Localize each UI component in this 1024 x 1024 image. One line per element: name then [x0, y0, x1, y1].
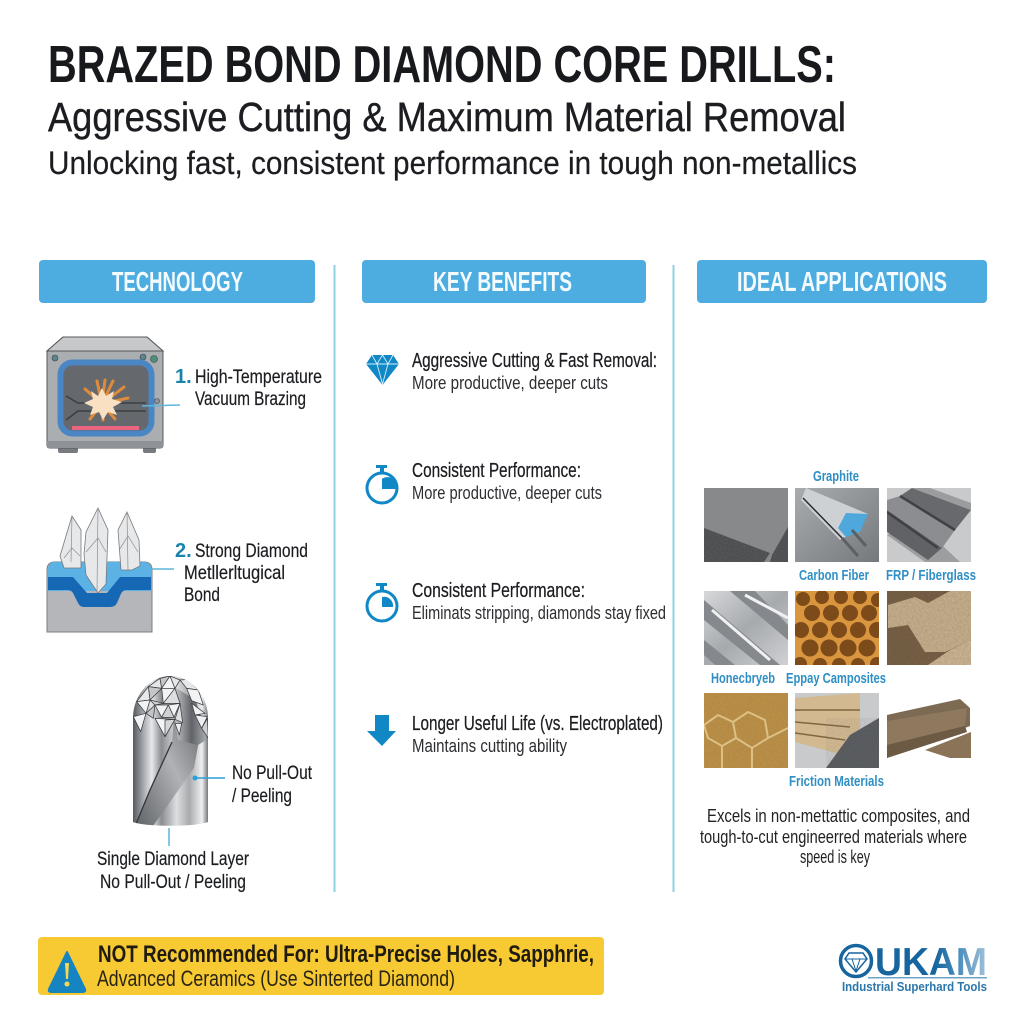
benefit: eliminates stripping: [412, 580, 666, 623]
benefit: aggressive cutting: More productive, deeper cuts: [412, 373, 608, 393]
icon: logo diamond ring: [840, 946, 872, 976]
label: frp fiberglass: FRP / Fiberglass: [886, 568, 976, 584]
benefit: longer useful life: Maintains cutting ability: [412, 736, 567, 756]
logo tagline: Industrial Superhard Tools: [842, 979, 987, 994]
panel: technology: [39, 260, 322, 893]
label: single diamond layer: [97, 849, 250, 893]
label: graphite: Graphite: [813, 469, 859, 485]
label: no pull-out: / Peeling: [232, 786, 292, 807]
label: single diamond layer: No Pull-Out / Peeling: [100, 872, 246, 893]
benefit: consistent performance: More productive, deeper cuts: [412, 483, 602, 503]
label: honeycomb: Honecbryeb: [711, 671, 775, 687]
label: step 2: [175, 540, 308, 606]
description text: speed is key: [800, 847, 870, 867]
banner text: NOT Recommended For: Ultra-Precise Holes, Sapphrie,: [98, 941, 594, 968]
tile: friction boards: [795, 693, 879, 768]
label: step 2: 2.: [175, 540, 192, 562]
heading: ideal applications: [697, 260, 987, 303]
panel: ideal applications: [697, 260, 987, 867]
label: carbon fiber: Carbon Fiber: [799, 568, 869, 584]
tagline: Unlocking fast, consistent performance in tough non-metallics: [48, 145, 857, 181]
tile: honeycomb: [795, 591, 879, 665]
heading: technology: [39, 260, 315, 303]
tile: friction brick: [887, 699, 971, 758]
benefit: aggressive cutting: [412, 350, 657, 393]
subtitle: Aggressive Cutting & Maximum Material Removal: [48, 94, 846, 140]
benefit: longer useful life: [412, 713, 663, 756]
benefit: longer useful life: Longer Useful Life (vs. Electroplated): [412, 713, 663, 735]
heading: technology: TECHNOLOGY: [112, 266, 243, 297]
label: no pull-out: No Pull-Out: [232, 763, 313, 784]
label: no pull-out: [232, 763, 313, 807]
banner text: [97, 941, 594, 991]
icon: stopwatch: [367, 465, 397, 503]
icon: core drill with diamond tip: [133, 676, 225, 846]
logo wordmark: UKAM: [875, 941, 987, 984]
description text: Excels in non-mettattic composites, and: [707, 806, 970, 826]
label: friction materials: Friction Materials: [789, 774, 884, 790]
heading: key benefits: KEY BENEFITS: [433, 266, 572, 297]
label: step 2: Strong Diamond: [195, 541, 308, 562]
tile: silver laminate: [704, 591, 788, 665]
heading: key benefits: [362, 260, 646, 303]
description text: tough-to-cut engineerred materials where: [700, 827, 967, 847]
label: step 1: 1.: [175, 366, 192, 388]
benefit: aggressive cutting: Aggressive Cutting & Fast Removal:: [412, 350, 657, 372]
benefit: eliminates stripping: Eliminats stripping, diamonds stay fixed: [412, 603, 666, 623]
label: step 1: High-Temperature: [195, 367, 322, 388]
benefit: consistent performance: [412, 460, 602, 503]
description text: [700, 806, 970, 867]
icon: diamond: [366, 355, 399, 385]
tile: carbon fiber: [795, 488, 879, 562]
tile: graphite sheet: [704, 488, 788, 562]
benefit: eliminates stripping: Consistent Performance:: [412, 580, 585, 602]
icon: diamond metallurgical bond: [47, 508, 174, 632]
tile: golden honeycomb: [704, 693, 788, 768]
benefit: consistent performance: Consistent Performance:: [412, 460, 581, 482]
tile: epoxy composite rock: [887, 591, 971, 665]
label: step 1: Vacuum Brazing: [195, 389, 306, 410]
icon: stopwatch: [367, 583, 397, 621]
callout: not recommended banner: [38, 937, 604, 995]
icon: down arrow: [367, 715, 396, 746]
label: epoxy composites: Eppay Camposites: [786, 671, 886, 687]
panel: key benefits: [362, 260, 666, 756]
icon: vacuum brazing furnace: [47, 337, 180, 453]
column dividers: [334, 265, 674, 892]
label: step 2: Bond: [184, 585, 220, 606]
logo: ukam: [840, 941, 987, 994]
label: single diamond layer: Single Diamond Layer: [97, 849, 250, 870]
icon: warning triangle: [49, 952, 85, 992]
banner text: Advanced Ceramics (Use Sinterted Diamond): [97, 966, 455, 991]
title block: [48, 36, 857, 181]
label: step 2: Metllerltugical: [184, 563, 285, 584]
label: step 1: [175, 366, 322, 410]
tile: frp ridges: [887, 488, 971, 562]
